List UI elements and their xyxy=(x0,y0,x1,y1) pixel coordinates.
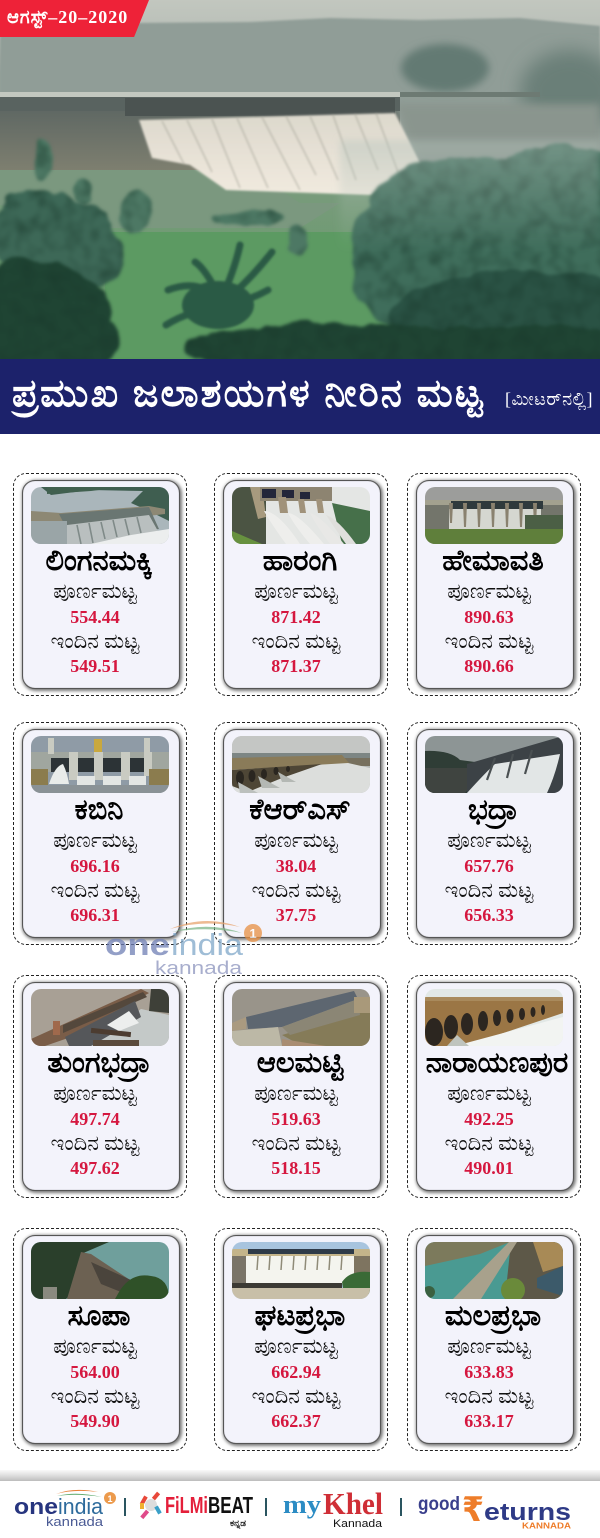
separator xyxy=(265,1498,267,1516)
today level value: 696.31 xyxy=(70,905,120,925)
today level value: 656.33 xyxy=(464,905,514,925)
photo xyxy=(425,736,563,793)
foreground foliage xyxy=(0,252,600,374)
full level value: 497.74 xyxy=(70,1109,120,1129)
photo xyxy=(31,736,169,793)
dam name: ನಾರಾಯಣಪುರ xyxy=(426,1047,568,1079)
full level label: ಪೂರ್ಣಮಟ್ಟ xyxy=(53,1081,137,1105)
today level value: 662.37 xyxy=(271,1411,321,1431)
full level value: 662.94 xyxy=(271,1362,321,1382)
today level value: 549.90 xyxy=(70,1411,120,1431)
right forest xyxy=(347,147,600,370)
spillway xyxy=(139,113,421,195)
panel: Tungabhadra xyxy=(13,975,187,1198)
photo xyxy=(425,989,563,1046)
photo xyxy=(232,736,370,793)
left trees xyxy=(0,187,120,291)
photo xyxy=(232,487,370,544)
logo: filmibeat: ಕನ್ನಡ xyxy=(230,1518,246,1530)
dam name: ಮಲಪ್ರಭಾ xyxy=(445,1300,541,1332)
today level label: ಇಂದಿನ ಮಟ್ಟ xyxy=(51,878,139,902)
grass xyxy=(0,170,600,359)
unit note: [ಮೀಟರ್‌ನಲ್ಲಿ] xyxy=(505,389,593,409)
today level label: ಇಂದಿನ ಮಟ್ಟ xyxy=(252,878,340,902)
dam name: ಕೆಆರ್‌ಎಸ್ xyxy=(249,794,351,826)
today level value: 37.75 xyxy=(276,905,316,925)
panel: Narayanapura xyxy=(407,975,581,1198)
today level value: 518.15 xyxy=(271,1158,321,1178)
hero photo: dam spillway in misty valley xyxy=(0,0,600,359)
today level label: ಇಂದಿನ ಮಟ್ಟ xyxy=(252,1384,340,1408)
full level value: 696.16 xyxy=(70,856,120,876)
photo xyxy=(425,487,563,544)
dam name: ಘಟಪ್ರಭಾ xyxy=(255,1300,345,1332)
dam name: ಸೂಪಾ xyxy=(68,1300,130,1332)
logo: mykhel kannada xyxy=(283,1492,383,1528)
today level label: ಇಂದಿನ ಮಟ್ಟ xyxy=(445,1131,533,1155)
full level label: ಪೂರ್ಣಮಟ್ಟ xyxy=(254,1081,338,1105)
dam wall xyxy=(0,108,400,173)
watermark: oneindia kannada: one xyxy=(105,927,170,962)
full level label: ಪೂರ್ಣಮಟ್ಟ xyxy=(447,1334,531,1358)
photo xyxy=(232,1242,370,1299)
today level value: 549.51 xyxy=(70,656,120,676)
full level value: 38.04 xyxy=(276,856,316,876)
full level value: 890.63 xyxy=(464,607,514,627)
photo xyxy=(232,989,370,1046)
date ribbon xyxy=(0,0,149,37)
today level label: ಇಂದಿನ ಮಟ್ಟ xyxy=(51,629,139,653)
dam name: ಲಿಂಗನಮಕ್ಕಿ xyxy=(45,545,153,577)
photo xyxy=(31,487,169,544)
watermark: oneindia kannada: 1 xyxy=(249,926,257,941)
panel: Bhadra xyxy=(407,722,581,945)
full level label: ಪೂರ್ಣಮಟ್ಟ xyxy=(254,1334,338,1358)
full level label: ಪೂರ್ಣಮಟ್ಟ xyxy=(53,1334,137,1358)
logo: oneindia kannada: india xyxy=(58,1494,104,1519)
full level value: 564.00 xyxy=(70,1362,120,1382)
dam name: ಕಬಿನಿ xyxy=(75,794,123,826)
dam name: ಹೇಮಾವತಿ xyxy=(442,545,544,577)
full level value: 871.42 xyxy=(271,607,321,627)
today level value: 633.17 xyxy=(464,1411,514,1431)
logo: oneindia kannada: 1 xyxy=(107,1494,113,1504)
today level value: 890.66 xyxy=(464,656,514,676)
full level label: ಪೂರ್ಣಮಟ್ಟ xyxy=(447,828,531,852)
footer shadow bar xyxy=(0,1470,600,1481)
panel: Kabini xyxy=(13,722,187,945)
full level label: ಪೂರ್ಣಮಟ್ಟ xyxy=(254,579,338,603)
panel: Linganamakki xyxy=(13,473,187,696)
full level value: 657.76 xyxy=(464,856,514,876)
panel: Ghataprabha xyxy=(214,1228,388,1451)
logo: filmibeat xyxy=(140,1492,253,1530)
full level label: ಪೂರ್ಣಮಟ್ಟ xyxy=(53,579,137,603)
today level label: ಇಂದಿನ ಮಟ್ಟ xyxy=(445,629,533,653)
logo: filmibeat: FiLMi xyxy=(165,1492,208,1518)
today level label: ಇಂದಿನ ಮಟ್ಟ xyxy=(252,629,340,653)
panel: Almatti xyxy=(214,975,388,1198)
dam name: ಭದ್ರಾ xyxy=(468,794,518,826)
separator xyxy=(124,1498,126,1516)
full level label: ಪೂರ್ಣಮಟ್ಟ xyxy=(254,828,338,852)
panel: Supa xyxy=(13,1228,187,1451)
full level value: 519.63 xyxy=(271,1109,321,1129)
full level label: ಪೂರ್ಣಮಟ್ಟ xyxy=(447,579,531,603)
panel: Malaprabha xyxy=(407,1228,581,1451)
full level label: ಪೂರ್ಣಮಟ್ಟ xyxy=(447,1081,531,1105)
today level value: 871.37 xyxy=(271,656,321,676)
photo xyxy=(31,989,169,1046)
today level label: ಇಂದಿನ ಮಟ್ಟ xyxy=(445,1384,533,1408)
photo xyxy=(31,1242,169,1299)
logo: goodreturns kannada: ₹ xyxy=(462,1490,484,1530)
logo: goodreturns kannada: eturns xyxy=(484,1499,571,1526)
full level value: 492.25 xyxy=(464,1109,514,1129)
today level label: ಇಂದಿನ ಮಟ್ಟ xyxy=(252,1131,340,1155)
watermark: oneindia kannada xyxy=(105,921,262,977)
dam name: ಹಾರಂಗಿ xyxy=(263,545,337,577)
watermark: oneindia kannada: india xyxy=(171,927,244,962)
full level value: 633.83 xyxy=(464,1362,514,1382)
full level value: 554.44 xyxy=(70,607,120,627)
dam name: ತುಂಗಭದ್ರಾ xyxy=(47,1047,151,1079)
today level value: 490.01 xyxy=(464,1158,514,1178)
logo: oneindia kannada xyxy=(14,1490,116,1528)
panel: KRS xyxy=(214,722,388,945)
panel: Hemavathi xyxy=(407,473,581,696)
photo xyxy=(425,1242,563,1299)
heading: ಪ್ರಮುಖ ಜಲಾಶಯಗಳ ನೀರಿನ ಮಟ್ಟ xyxy=(12,373,485,415)
palm tree xyxy=(166,245,272,329)
title banner xyxy=(0,359,600,434)
today level label: ಇಂದಿನ ಮಟ್ಟ xyxy=(51,1131,139,1155)
logo: goodreturns kannada xyxy=(418,1490,571,1530)
logo: oneindia kannada: one xyxy=(14,1494,58,1519)
today level label: ಇಂದಿನ ಮಟ್ಟ xyxy=(445,878,533,902)
mid trees xyxy=(33,138,306,255)
full level label: ಪೂರ್ಣಮಟ್ಟ xyxy=(53,828,137,852)
logo: goodreturns kannada: good xyxy=(418,1494,460,1515)
today level label: ಇಂದಿನ ಮಟ್ಟ xyxy=(51,1384,139,1408)
separator xyxy=(400,1498,402,1516)
dam name: ಆಲಮಟ್ಟಿ xyxy=(257,1047,343,1079)
date text: ಆಗಸ್ಟ್–20–2020 xyxy=(7,7,128,27)
panel: Harangi xyxy=(214,473,388,696)
today level value: 497.62 xyxy=(70,1158,120,1178)
